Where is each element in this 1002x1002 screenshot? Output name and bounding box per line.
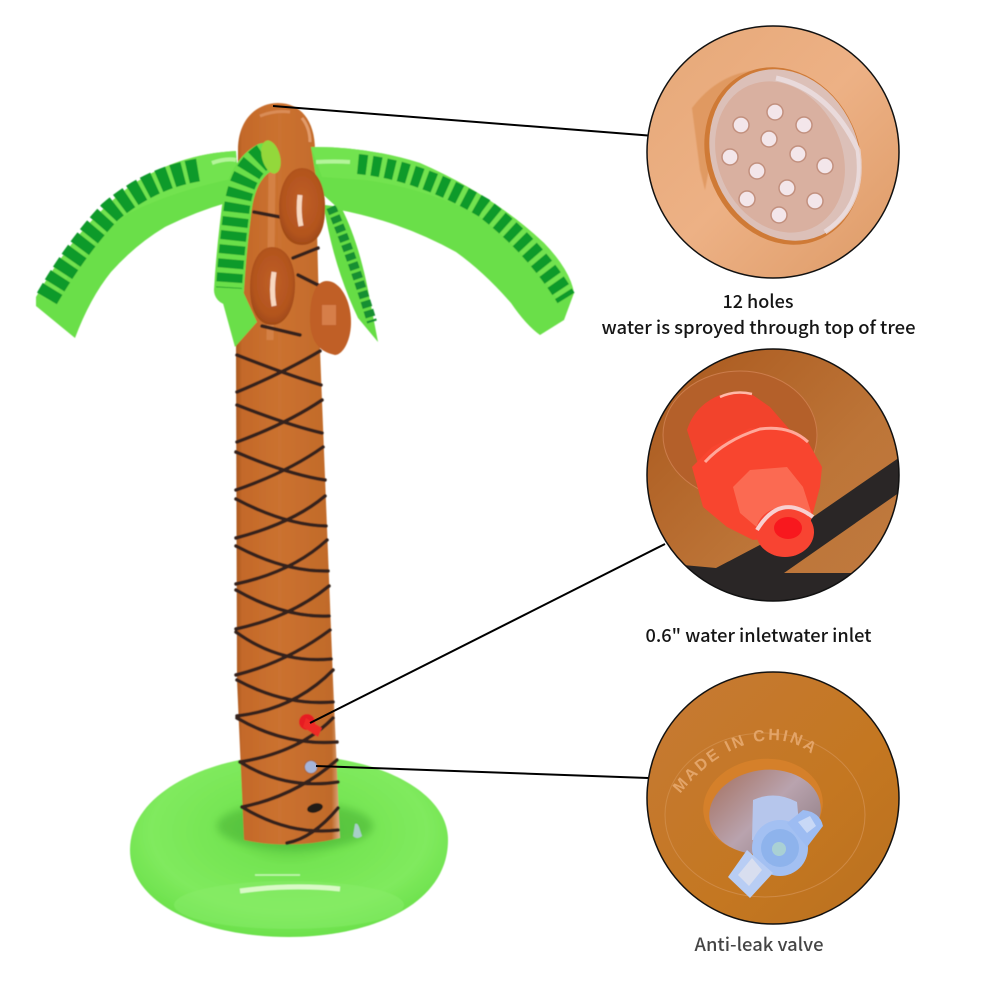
caption: 12 holes: water is sproyed through top of tree (602, 314, 916, 340)
coconut: middle (250, 247, 295, 325)
right leaf (311, 147, 574, 335)
black stripe (683, 457, 900, 610)
inflatable ring base (130, 755, 448, 937)
clear valve on trunk (304, 760, 318, 774)
back right leaf (325, 205, 378, 342)
trunk cross stripes (236, 212, 338, 843)
left leaf (36, 151, 238, 338)
embossed text: MADE IN CHINA (672, 728, 814, 793)
ring valve (353, 824, 362, 838)
caption: 12 holes (602, 288, 916, 340)
caption: water inlet: 0.6" water inletwater inlet (646, 622, 872, 648)
12 spray holes (722, 104, 833, 223)
valve recess (703, 759, 823, 846)
front leaf (218, 138, 284, 347)
red water inlet on trunk (299, 714, 322, 737)
leader line: top of tree (273, 106, 648, 136)
clear spray disc (704, 67, 862, 245)
logo mark on trunk (306, 802, 324, 814)
palm tree illustration (36, 103, 574, 937)
caption: anti-leak valve: Anti-leak valve (694, 931, 824, 957)
coconut: upper (279, 168, 325, 245)
coconut: lower right (310, 281, 351, 355)
caption: 12 holes: 12 holes (722, 288, 794, 314)
red nozzle (687, 394, 790, 462)
leader line: water inlet (310, 544, 665, 723)
detail circle: water inlet (647, 349, 900, 610)
blue valve (752, 795, 800, 840)
trunk (236, 103, 340, 845)
leader line: valve (316, 766, 648, 778)
detail circle: spray holes (647, 26, 899, 278)
detail circle: anti-leak valve (646, 671, 900, 925)
